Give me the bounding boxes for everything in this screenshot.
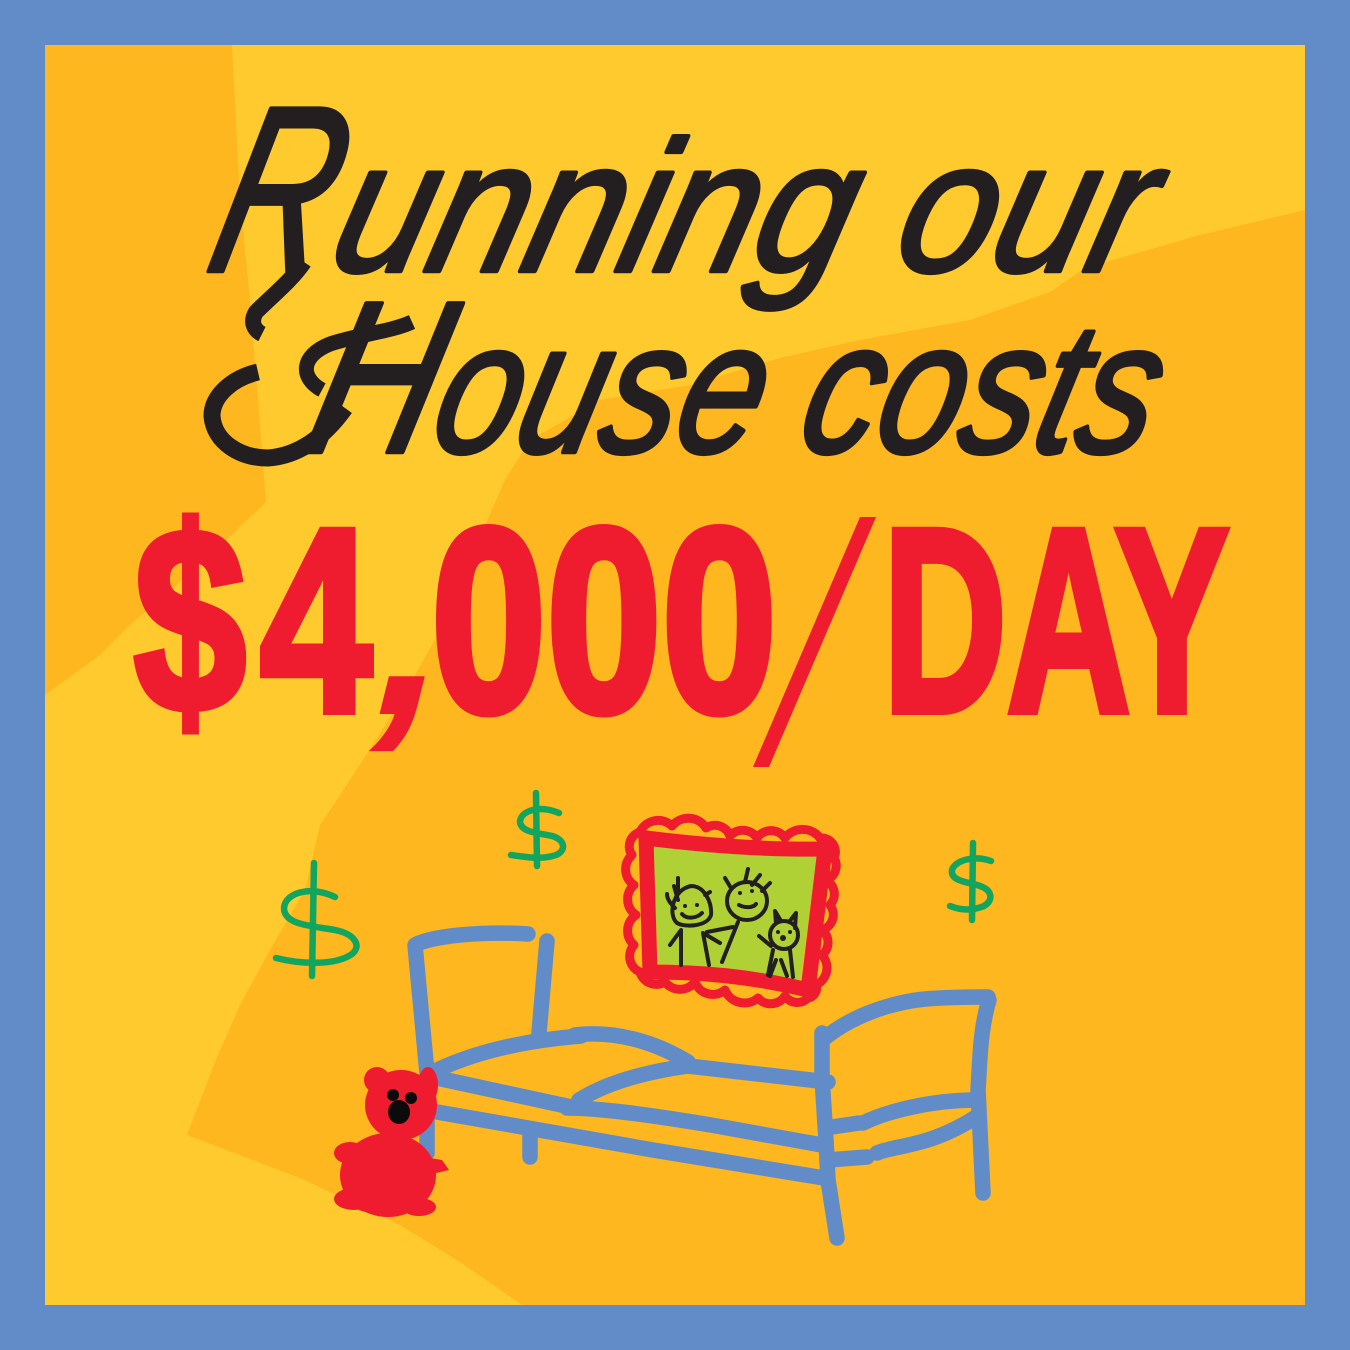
bear ears [364, 1067, 390, 1093]
title line 1 [190, 57, 1186, 321]
icon: framed family picture [626, 818, 836, 1004]
title flourish: H loop [212, 372, 345, 458]
icon: bed [415, 933, 989, 1238]
scalloped frame edge [626, 818, 836, 1004]
icon: green dollar sign left [276, 863, 357, 976]
title flourish: H top swash [306, 322, 412, 390]
figure one [667, 878, 720, 965]
bed headboard [415, 933, 528, 1153]
icon: green dollar sign right [950, 843, 991, 920]
icon: green dollar sign middle [511, 793, 563, 866]
bear feet [334, 1188, 374, 1210]
title line 1: unning our [316, 104, 1186, 311]
bear arms [334, 1142, 366, 1164]
figure two [707, 869, 770, 962]
headline: cost per day [134, 474, 1229, 767]
headline digit four: 4 [260, 474, 373, 767]
headline dollar sign: $ [134, 474, 246, 767]
figure three: pet [759, 911, 798, 977]
bear face [387, 1089, 417, 1124]
picture canvas [653, 844, 817, 982]
icon: red teddy bear [334, 1067, 449, 1217]
bed side rail [437, 1112, 824, 1178]
headline zeros: 000 [431, 474, 777, 767]
title: script heading [190, 57, 1194, 498]
bed mattress and pillow [437, 1036, 581, 1070]
picture frame [646, 838, 825, 990]
faces [683, 889, 792, 941]
bear head [365, 1070, 437, 1140]
headline comma: , [351, 495, 485, 764]
bear body [340, 1133, 436, 1217]
child drawing family [667, 869, 798, 977]
title flourish: R tail [253, 262, 304, 334]
bed footboard [822, 1033, 837, 1238]
title line 2: House costs [288, 257, 1194, 498]
headline slash [753, 517, 876, 767]
title line 1: R [190, 57, 374, 321]
